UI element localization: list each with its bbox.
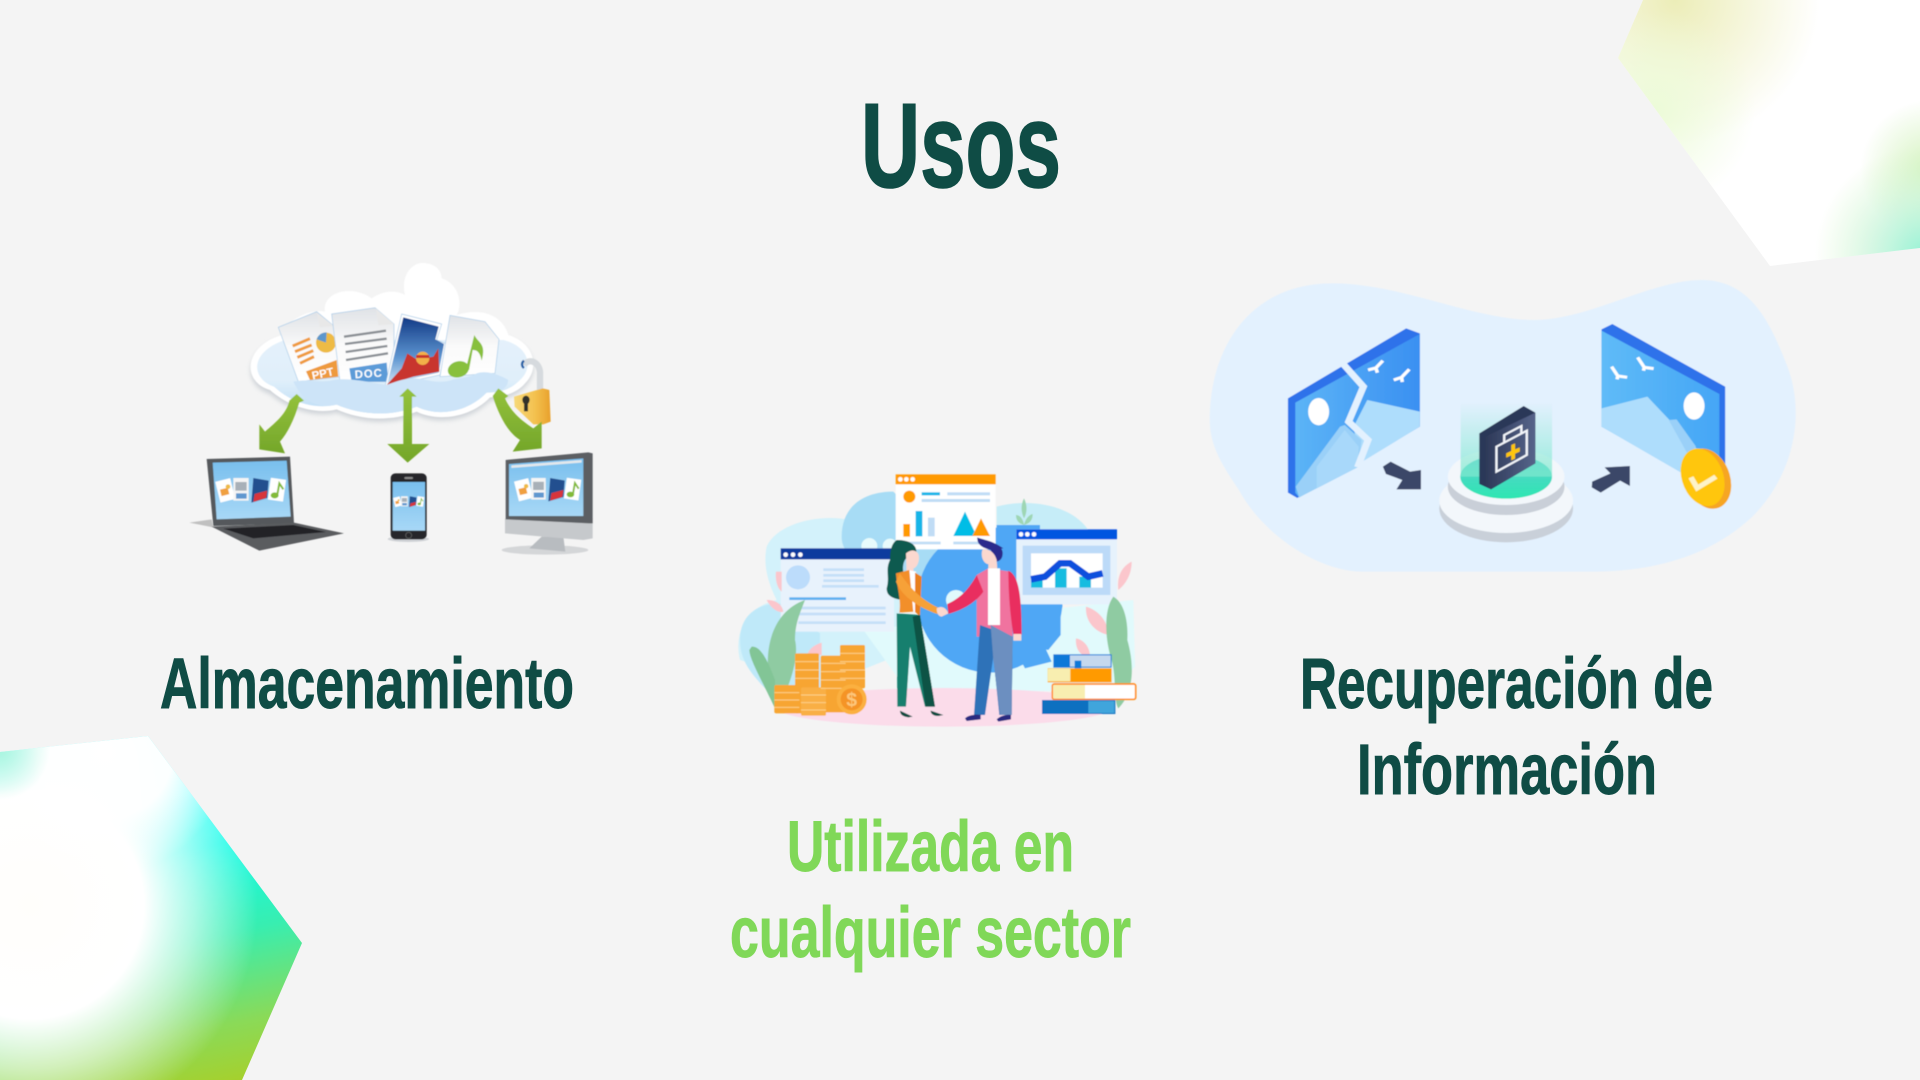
arrow: cloud to phone — [387, 388, 429, 463]
cloud — [251, 263, 533, 418]
photo card — [385, 314, 447, 387]
padlock — [514, 361, 551, 424]
music document — [440, 315, 499, 380]
background blob — [1210, 280, 1796, 572]
cloud front wave — [293, 372, 508, 414]
broken picture — [1288, 328, 1420, 498]
laptop — [189, 457, 344, 551]
label: Recuperación de Información: Recuperación de — [1300, 645, 1713, 724]
profile window — [781, 548, 894, 632]
background blobs — [738, 492, 1135, 727]
arrow: cloud to monitor — [493, 388, 542, 452]
label: Utilizada en cualquier sector — [730, 808, 1131, 973]
repaired picture — [1601, 324, 1725, 473]
arrow: cloud to laptop — [259, 394, 304, 453]
document: DOC — [332, 308, 394, 382]
label: Utilizada en cualquier sector: Utilizada en — [787, 808, 1074, 887]
document: PPT: PPT — [311, 366, 335, 383]
label: Utilizada en cualquier sector: cualquier sector — [730, 894, 1131, 973]
books — [1042, 654, 1136, 714]
man — [937, 537, 1022, 722]
document: PPT — [278, 312, 340, 383]
woman — [887, 540, 943, 717]
illustration: data recovery — [1210, 280, 1796, 572]
label: Recuperación de Información: Información — [1357, 731, 1657, 810]
decorative gradient shape: bottom left — [0, 720, 320, 1080]
arrow: out of repair kit — [1592, 466, 1630, 493]
check coin — [1674, 444, 1738, 513]
coin stacks — [774, 645, 867, 716]
phone — [388, 473, 429, 542]
sprout — [1016, 498, 1033, 525]
decorative gradient shape: top right — [1618, 0, 1920, 266]
dashboard window: orange — [896, 474, 996, 549]
illustration: business handshake — [738, 474, 1136, 727]
document: DOC: DOC — [354, 367, 383, 381]
arrow: into repair kit — [1383, 462, 1421, 489]
chart window — [1016, 529, 1117, 604]
label: Recuperación de Información — [1300, 645, 1713, 810]
first aid kit tile — [1479, 406, 1535, 489]
label: Almacenamiento: Almacenamiento — [160, 645, 574, 724]
cloud shadow — [251, 338, 533, 422]
title: Usos — [861, 79, 1061, 213]
plants — [749, 597, 1132, 710]
illustration: cloud storage syncing to devices — [189, 263, 593, 555]
platform with glow — [1439, 402, 1573, 542]
pink leaves — [767, 562, 1132, 657]
coin stacks: $ — [846, 690, 857, 711]
desktop monitor — [502, 452, 593, 555]
